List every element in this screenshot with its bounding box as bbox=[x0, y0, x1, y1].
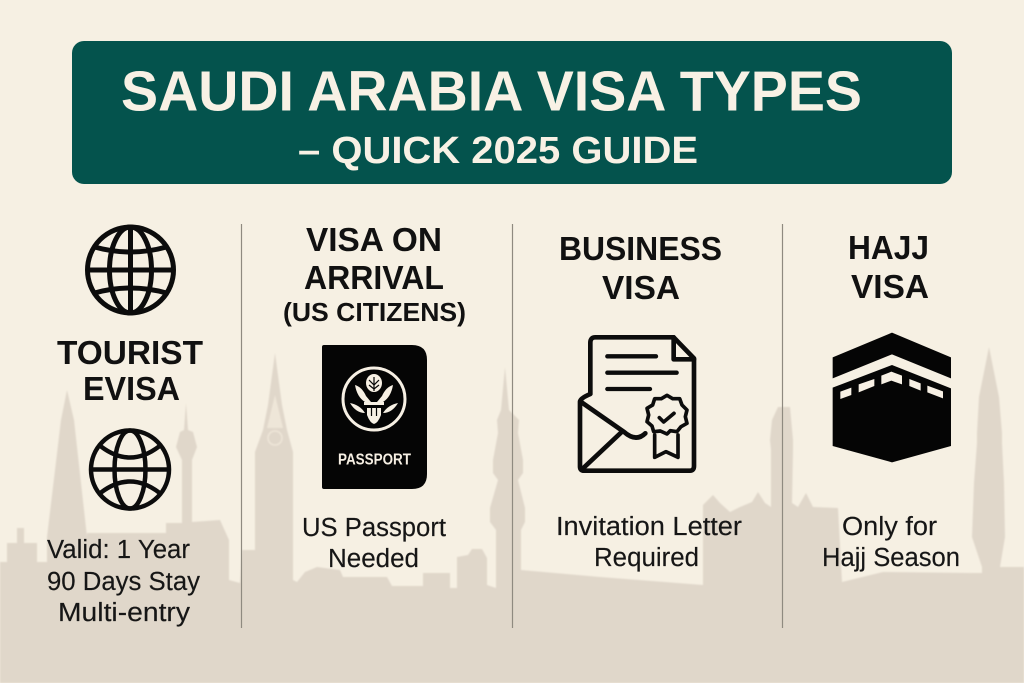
icon: globe small bbox=[91, 430, 169, 508]
icon: invitation letter bbox=[580, 337, 694, 471]
heading: hajj visa: HAJJ bbox=[848, 229, 929, 266]
title line 2: – QUICK 2025 GUIDE bbox=[298, 130, 698, 172]
icon: kaaba bbox=[833, 333, 951, 462]
text: tourist details: Valid: 1 Year bbox=[47, 536, 191, 564]
text: passport needed bbox=[302, 514, 446, 573]
text: passport needed: Needed bbox=[328, 545, 419, 573]
panel: visa on arrival bbox=[283, 221, 466, 573]
background skyline silhouette bbox=[0, 347, 1024, 683]
panel: business visa bbox=[556, 230, 743, 572]
text: only for hajj season bbox=[822, 513, 960, 572]
icon: passport bbox=[322, 345, 427, 489]
heading: business visa: VISA bbox=[602, 269, 680, 306]
heading: visa on arrival: ARRIVAL bbox=[304, 259, 444, 296]
heading: hajj visa: VISA bbox=[851, 268, 929, 305]
heading: business visa bbox=[559, 230, 722, 306]
text: tourist details: Multi-entry bbox=[58, 599, 190, 627]
heading: visa on arrival bbox=[283, 221, 466, 327]
title banner bbox=[72, 41, 952, 184]
text: invitation letter required: Invitation Letter bbox=[556, 513, 743, 541]
icon: globe large bbox=[88, 227, 174, 313]
heading: hajj visa bbox=[848, 229, 929, 305]
panel: hajj visa bbox=[822, 229, 960, 572]
text: passport needed: US Passport bbox=[302, 514, 446, 542]
text: invitation letter required: Required bbox=[594, 544, 699, 572]
column dividers bbox=[242, 224, 782, 628]
icon: passport: PASSPORT bbox=[338, 452, 411, 468]
text: invitation letter required bbox=[556, 513, 743, 572]
heading: visa on arrival: (US CITIZENS) bbox=[283, 297, 466, 327]
text: only for hajj season: Only for bbox=[842, 513, 938, 541]
text: tourist details: 90 Days Stay bbox=[47, 568, 200, 596]
heading: tourist evisa: TOURIST bbox=[57, 334, 203, 371]
panel: tourist evisa: EVISA bbox=[83, 370, 180, 407]
panel: tourist evisa bbox=[47, 227, 203, 627]
heading: business visa: BUSINESS bbox=[559, 230, 722, 267]
title line 1: SAUDI ARABIA VISA TYPES bbox=[121, 60, 862, 124]
heading: visa on arrival: VISA ON bbox=[306, 221, 442, 258]
text: tourist details bbox=[47, 536, 200, 627]
text: only for hajj season: Hajj Season bbox=[822, 544, 960, 572]
